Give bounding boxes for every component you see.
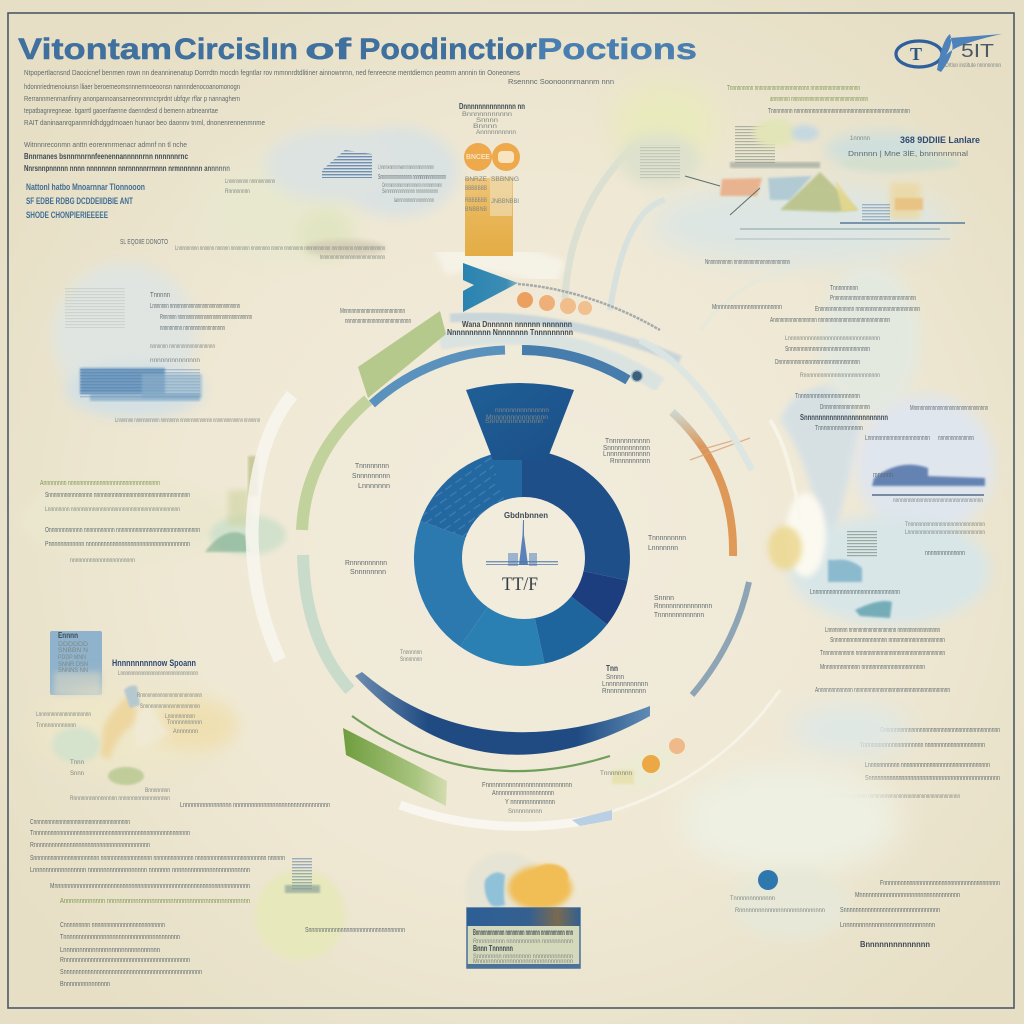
ring node: [632, 370, 642, 382]
panel: blue info card: Ennnn: [58, 631, 78, 640]
text lines: nnnnnnnnnnnnnnnnnnnnnnnnnn: [345, 316, 411, 325]
teal block: [828, 560, 862, 582]
left cloud: orange illustration: Rnnnnnnnnnnnnnnnn nnnnnnnnnnnnnnnnnnn: [70, 795, 170, 802]
bottom panel card: Rnnnnnnnnn nnnnnnnnnnn nnnnnnnnnn: [473, 938, 573, 945]
intro text block: Ntpopertlacnsnd Daocicnef benmen rown nn deanninenatup Dorrrdtn mocdn fegntlar rov mmnnrdtdlitiner ainnownrnn, ned fenreecne mentdierncn peomrn annnin tin Ooneonens: [24, 68, 520, 77]
logo: T: [910, 44, 922, 64]
bottom left text block: [30, 817, 285, 988]
right column text lower: [780, 625, 1000, 800]
title: of: [305, 33, 353, 66]
green and navy labels: [705, 83, 980, 266]
inner ring labels: Tnnnnnnnnn: [648, 533, 686, 542]
bottom right note with blue dot: [730, 870, 1000, 949]
intro text block: SF EDBE RDBG DCDDEIIDBIE ANT: [26, 196, 133, 206]
orange column: RBBBBBB: [465, 197, 487, 204]
green and navy labels: 1nnnnn: [850, 135, 870, 142]
title: Circislın: [174, 33, 298, 66]
right labels: nnnnnnnnnnnnnn: [925, 548, 965, 557]
left cloud: orange illustration: Bnnnnnnnn: [145, 787, 170, 794]
orange column: BNCEE: [466, 154, 490, 161]
right column text upper: Annnnnnnnnnnnnnnnn nnnnnnnnnnnnnnnnnnnnnnnnnnnn: [770, 315, 890, 324]
right labels: Tnnnnnnnnnnnnnnnnnnnnnnnnnnnnn: [905, 521, 985, 528]
left cloud: orange illustration: Tnnnnnnnnnnn: [167, 719, 202, 726]
green and navy labels: Nnnnnnnnnnn nnnnnnnnnnnnnnnnnnnnnnn: [705, 257, 790, 266]
left cloud: green plant: Pnnnnnnnnnnnn nnnnnnnnnnnnnnnnnnnnnnnnnnnnnnnnnnn: [45, 539, 190, 548]
bottom right note with blue dot: Lnnnnnnnnnnnnnnnnnnnnnnnnnnnnn: [840, 920, 935, 929]
factory: [80, 368, 165, 394]
bottom left text block: Rnnnnnnnnnnnnnnnnnnnnnnnnnnnnnnnnnnnnnnnnnn: [60, 955, 190, 964]
left cloud: orange illustration: Lnnnnnnnnnn: [165, 713, 195, 720]
right column text lower: Tnnnnnnnnnnnn nnnnnnnnnnnnnnnnnnnnnnnnnnnnnnnnnn: [820, 648, 945, 657]
right column text lower: Snnnnnnnnnnnnnnnnnnnn nnnnnnnnnnnnnnnnnnnnn: [830, 635, 945, 644]
left cloud: orange illustration: Hnnnnnnnnnow Spoann: [112, 658, 196, 669]
logo: 5IT: [961, 41, 994, 61]
bottom left text block: Snnnnnnnnnnnnnnnnnnnnnnnnnnnnnnnnnnnnnnnnnnnnnn: [60, 967, 202, 976]
panel: blue info card: PDDP MNN: [58, 654, 86, 661]
left cloud: orange illustration: Snnn: [70, 770, 84, 777]
lower centre labels: Snnnnnnnnn: [508, 808, 542, 815]
right column text upper: Tnnnnnnnnnnnnnnnnnnnnnn: [795, 391, 860, 400]
orange right arc: [672, 412, 733, 556]
column heading: Dnnnnnnnnnnnnnn nn: [459, 102, 525, 111]
lower centre labels: Tnnnnnnnn: [600, 770, 632, 777]
right labels: Lnnnnnnnnnnnnnnnnnnnnnnnnnnnnnnn: [810, 587, 900, 596]
blue arrow triangle: [463, 263, 518, 312]
logo: [896, 34, 1002, 72]
panel: blue info card: DDDDDD: [58, 641, 88, 648]
pale left arc: [303, 555, 350, 690]
left cloud: green plant: Annnnnnnn nnnnnnnnnnnnnnnnnnnnnnnnnnnnnnnn: [40, 478, 160, 487]
inner ring labels: Tnn: [606, 664, 618, 673]
caption lines: lnnnnnnnnnnnnnnnnnnnnnnnnnn: [320, 254, 385, 261]
text lines: Lnnnnnnn nnnnnnnnnnnnnnnnnnnnnnnnnnnnnn: [150, 301, 240, 310]
logo: Ortlon institute nnnnnnnnn: [945, 62, 1001, 69]
bottom right orange dots and yellow tile: [610, 738, 685, 790]
navy building: [872, 465, 985, 486]
right column text lower: Mnnnnnnnnnnnnn nnnnnnnnnnnnnnnnnnnnnnn: [820, 662, 925, 671]
right column text upper: [712, 283, 920, 400]
central donut chart: Gbdnbnnen: [504, 511, 548, 520]
navy crescent bottom: [355, 672, 650, 755]
text lines: nnnnnnnnnnnnnn: [150, 357, 200, 364]
faint bottom right shapes: [680, 705, 910, 875]
right column text upper: Lnnnnnnnnnnnnnnnnnnnnnnnnnnnnnnnn: [785, 335, 880, 342]
blue tile: [768, 176, 812, 200]
bottom panel card: Bnnn Tnnnnnn: [473, 944, 513, 953]
bottom right note with blue dot: Snnnnnnnnnnnnnnnnnnnnnnnnnnnnnnnn: [840, 905, 940, 914]
green and navy labels: 368 9DDIIE Lanlare: [900, 135, 980, 146]
text lines: Rnnnnnn nnnnnnnnnnnnnnnnnnnnnnnnnnnnnnnnn: [160, 312, 252, 321]
green and navy labels: Tnnnnnnnn nnnnnnnnnnnnnnnnnnnnnnnnnnnnnnnnnnnnnnnnnnn: [768, 106, 910, 115]
caption lines: Sennnnnnnnnnnnnn nnnnnnnnnnn: [382, 188, 438, 195]
arc top labels: Nnnnnnnnnn Nnnnnnnn Tnnnnnnnnn: [447, 328, 573, 337]
central donut chart: [414, 383, 630, 666]
column heading: Bnnnnnnnnnnn: [462, 111, 512, 118]
column heading: Bnnnn: [473, 123, 497, 130]
orange column: BNBBNB: [465, 206, 487, 213]
right labels: [800, 402, 985, 596]
central donut chart: nnnnnnnnnnnnnnn: [495, 407, 549, 414]
title: [18, 33, 697, 66]
white outer ring: [252, 256, 800, 826]
inner ring labels: Lnnnnnnn: [648, 543, 678, 552]
text lines: Lnnnnnnn nnnnnnnnnnn nnnnnnnn nnnnnnnnnnnnnn nnnnnnnnnnnnn nnnnnnn: [115, 417, 260, 424]
bottom panel card: Snnnnnnnn nnnnnnnnn nnnnnnnnnnnnn: [473, 953, 573, 960]
inner ring labels: [345, 436, 712, 695]
funnel neck: [466, 383, 574, 460]
bottom panel card: Mnnnnnnnnnnnnnnnnnnnnnnnnnnnnnn: [473, 958, 573, 965]
intro text block: SL EQOIIE DONOTO: [120, 237, 168, 246]
right labels: Tnnnnnnnnnnnnnnnn: [815, 423, 863, 432]
lower centre labels: Y nnnnnnnnnnnnnn: [505, 797, 555, 806]
arc top labels: [447, 320, 573, 337]
left cloud: orange illustration: Tnnnnnnnnnnnnn: [36, 722, 76, 729]
right column text upper: Snnnnnnnnnnnnnnnnnnnnnnnnnnnnnn: [785, 344, 870, 353]
bottom left text block: Lnnnnnnnnnnnnnnnnn nnnnnnnnnnnnnnnnnnn nnnnnnn nnnnnnnnnnnnnnnnnnnnnnnnn: [30, 865, 250, 874]
left cloud: orange illustration: Lnnnnnnnnnnnnnnnnnnnnnnnnnnnnnnn: [118, 670, 198, 677]
right column text upper: Ennnnnnnnnnnnnn nnnnnnnnnnnnnnnnnnnnnnnnn: [815, 304, 920, 313]
arc top labels: Wana Dnnnnnn nnnnnn nnnnnnn: [462, 320, 572, 329]
orange dots: [517, 292, 592, 315]
caption lines: Lnnnmennnnnnemnnnnnnnnnnnnnnnn: [378, 164, 434, 171]
bottom left text block: Cnnnnnnnnn nnnnnnnnnnnnnnnnnnnnnnnnn: [60, 920, 165, 929]
right column text upper: Tnnnnnnnnn: [830, 283, 858, 292]
right labels: Snnnnnnnnnnnnnnnnnnnnnnn: [800, 413, 888, 422]
green and navy labels: Dnnnnn | Mne 3lE, bnnnnnnnnal: [848, 149, 968, 158]
intro text block: [24, 68, 520, 246]
bottom left text block: Annnnnnnnnnnnn nnnnnnnnnnnnnnnnnnnnnnnnnnnnnnnnnnnnnnnnnnnnn: [60, 896, 250, 905]
column heading: Annnnnnnnnn: [476, 129, 516, 136]
right labels: Lnnnnnnnnnnnnnnnnnnnnnnn: [865, 433, 930, 442]
text lines: Mnnnnnnnnnnnnnnnnnnnnnnnn: [340, 306, 405, 315]
caption lines: [175, 164, 446, 261]
left cloud: green plant: Lnnnnnnnn nnnnnnnnnnnnnnnnnnnnnnnnnnnnnnnnnnnnnnnn: [45, 506, 180, 513]
title: Vitontam: [18, 33, 172, 66]
lower centre labels: [482, 770, 632, 815]
orange column: JNBBNBBI: [491, 198, 519, 205]
intro text block: hdonnriedmenoiunsn lliaer beroemeomsnnnemnoeoonsn nannndenocoanomonogn: [24, 82, 240, 91]
bottom right note with blue dot: Tnnnnnnnnnnnnn: [730, 895, 775, 902]
inner ring labels: Rnnnnnnnnnn: [345, 558, 387, 567]
green top band: [358, 311, 446, 398]
panel: blue info card: SNNR DSN: [58, 661, 88, 668]
left cloud: green plant: Snnnnnnnnnnnnnnnn nnnnnnnnnnnnnnnnnnnnnnnnnnnnnnnnnnn: [45, 490, 190, 499]
bottom cloud icon: [465, 852, 572, 928]
right cloud: blue halo: [780, 265, 995, 625]
intro text block: Witnnnreconmn anttn eorenmrmenacr admnf nn tl nche: [24, 140, 187, 149]
green and navy labels: Tnnnnnnnnn nnnnnnnnnnnnnnnnnnnnn nnnnnnnnnnnnnnnnnnn: [727, 83, 860, 92]
left cloud: green plant: nnnnnnnnnnnnnnnnnnnnnnn: [70, 557, 135, 564]
bottom panel card: [467, 908, 580, 968]
left cloud: orange illustration: Tnnn: [70, 759, 84, 766]
intro text block: Nattonl hatbo Mnoarnnar Tlonnooon: [26, 182, 145, 192]
caption lines: Rnnnnnnnn: [225, 188, 250, 195]
column heading: [459, 102, 525, 136]
thin green arc: [352, 716, 610, 771]
central donut chart: TT/F: [502, 574, 538, 595]
left cloud: orange illustration: [35, 658, 330, 809]
inner ring labels: Snnnnnnnnn: [352, 471, 390, 480]
text lines: nnnnnnnnn nnnnnnnnnnnnnnnnn: [160, 323, 225, 332]
lower centre labels: Fnnnnnnnnnnnnnnnnnnnnnnnnnn: [482, 780, 572, 789]
panel: blue info card: SNBBN N: [58, 647, 88, 654]
bottom left text block: Lnnnnnnnnnnnnnnnnnnnnnnnnnnnnnn: [60, 945, 160, 954]
bottom left text block: Bnnnnnnnnnnnnnnn: [60, 979, 110, 988]
left cloud: green plant: Onnnnnnnnnnnn nnnnnnnnnnn nnnnnnnnnnnnnnnnnnnnnnnnnnnnnn: [45, 525, 200, 534]
text lines: Tnnnnn: [150, 290, 170, 299]
right labels: nnnnnnnnnnnnnn: [938, 433, 974, 442]
title: Poodinctior: [359, 33, 537, 66]
yellow blob right: [768, 526, 802, 570]
central donut chart: Snnnnnnnnnnnnnn: [485, 418, 543, 425]
inner ring labels: Tnnnnnnnnnnnnn: [654, 610, 704, 619]
bottom left text block: Tnnnnnnnnnnnnnnnnnnnnnnnnnnnnnnnnnnnnnn: [60, 932, 180, 941]
illustration cloud: upper left city: [175, 127, 458, 261]
bottom right note with blue dot: Rnnnnnnnnnnnnnnnnnnnnnnnnnnn: [735, 907, 825, 914]
donut hub: [463, 497, 585, 619]
right column text upper: Rnnnnnnnnnnnnnnnnnnnnnnnnnnn: [800, 372, 880, 379]
bottom left text block: Cnnnnnnnnnnnnnnnnnnnnnnnnnnnnnnnnnnn: [30, 817, 130, 826]
orange column: SBBNNG: [491, 176, 519, 183]
caption lines: Onnnnnnnnnnnnnnnnnnnnn nnnnnnnnnnn: [382, 182, 442, 189]
text lines: nnnnnnn nnnnnnnnnnnnnnnnnn: [150, 343, 215, 350]
yellow tile: [890, 183, 920, 219]
arc: grey top sweep: [440, 284, 680, 385]
right labels: Dnnnnnnnnnnnnnnnnnn: [820, 402, 870, 411]
intro text block: tepatbagnregneae. bgarrtl gaoenfaenne daenndesd d bemenn arbneanrtae: [24, 106, 218, 115]
left cloud: orange illustration: Annnnnnn: [173, 728, 198, 735]
inner ring labels: Tnnnnnnnnnnn: [605, 436, 650, 445]
white glow: [786, 493, 826, 577]
illustration cloud: left factory: [53, 263, 411, 424]
intro text block: Rerrannmenrnanfinny anonpannoansanneonmnncrprdnt ubfqyr rflar p nannaghem: [24, 94, 240, 103]
orange column: [459, 102, 525, 256]
inner ring labels: Snnnn: [654, 593, 674, 602]
illustration: green circle with tower: Snnnnnnnnnnnnnnnnnnnnnnnnnnnnnnnnn: [305, 925, 405, 934]
caption lines: lannnnnnnnnnnnnnnnn: [394, 197, 434, 204]
spire icon: [486, 520, 558, 566]
bottom left text block: Rnnnnnnnnnnnnnnnnnnnnnnnnnnnnnnnnnnnnnnn: [30, 840, 150, 849]
intro text block: RAIT daninaanrqpanmnldhdggdrnoaen hunaor beo daonnv tnml, dnonenrennenmnme: [24, 118, 265, 127]
green left arc: [302, 400, 368, 530]
orange spark lines: [690, 438, 750, 460]
left cloud: orange illustration: Rnnnnnnnnnnnnnnnnnnnnnnnnn: [137, 692, 202, 699]
panel: blue info card: [50, 631, 102, 695]
pale inner right halo: [640, 340, 752, 470]
central donut chart: Mnnnnnnnnnnnnnnn: [486, 414, 548, 421]
right column text upper: Dnnnnnnnnnnnnnnnnnnnnnnnnnnnnnn: [775, 357, 860, 366]
bottom left text block: Snnnnnnnnnnnnnnnnnnnnnnn nnnnnnnnnnnnnnnnnn nnnnnnnnnnnnnn nnnnnnnnnnnnnnnnnnnnnnnnn nnnnnn: [30, 853, 285, 862]
green pyramid: [780, 172, 858, 212]
right column text lower: Lnnnnnnnn nnnnnnnnnnnnnnnnnnn nnnnnnnnnnnnnnnnn: [825, 625, 940, 634]
building: [322, 150, 372, 178]
top text right fragment: Rsennnc Soonoonnrnannm nnn: [508, 77, 614, 86]
illustration cloud: upper right landscape: [613, 83, 980, 266]
inner ring labels: Rnnnnnnnnnnn: [602, 686, 646, 695]
bottom right note with blue dot: Bnnnnnnnnnnnnnn: [860, 940, 930, 949]
blue ring top: [372, 350, 628, 404]
faint sweeping arcs: [565, 110, 880, 330]
illustration cloud: upper left city: Snnnnnnnnnnnnnnnn nnnnnnnnnnnnnnnnn: [378, 172, 446, 181]
inner ring labels: Snnnnnnnn: [350, 567, 386, 576]
green lower band: [343, 728, 447, 806]
orange tile: [720, 178, 762, 196]
left cloud: orange illustration: Lnnnnnnnnnnnnnnnnnnnn: [36, 711, 91, 718]
intro text block: SHODE CHONPIERIEEEEE: [26, 210, 108, 220]
caption lines: Lnnnnnnnnn nnnnnnnnnnn: [225, 178, 275, 185]
orange column: BNRZE: [465, 176, 488, 183]
inner ring labels: Lnnnnnnnnnnnn: [603, 449, 650, 458]
inner ring labels: Rnnnnnnnnnnnnnnn: [654, 601, 712, 610]
orange column: BBBBBBB: [465, 185, 487, 192]
left cloud: orange illustration: Snnnnnnnnnnnnnnnnnnnnnn: [140, 703, 200, 710]
lower centre labels: Annnnnnnnnnnnnnnnnnn: [492, 788, 554, 797]
intro text block: Bnnrnanes bsnnrnnrnnfeenennannnnnrnn nnnnnnrnc: [24, 152, 188, 161]
bottom blue tick: [572, 810, 612, 826]
bottom left text block: Tnnnnnnnnnnnnnnnnnnnnnnnnnnnnnnnnnnnnnnnnnnnnnnnnnnnnnn: [30, 828, 190, 837]
right column text lower: Annnnnnnnnnnnn nnnnnnnnnnnnnnnnnnnnnnnnnnnnnnnnnnnn: [815, 685, 950, 694]
column heading: Snnnn: [476, 117, 498, 124]
right column text upper: Mnnnnnnnnnnnnnnnnnnnnnnn: [712, 302, 782, 311]
inner ring labels: Snnnnnnnnnnnn: [603, 443, 650, 452]
right column text upper: Pnnnnnnnnnnnnnnnnnnnnnnnnnnnnnnnn: [830, 293, 916, 302]
teal mound: [855, 601, 892, 618]
bottom left text block: Mnnnnnnnnnnnnnnnnnnnnnnnnnnnnnnnnnnnnnnnnnnnnnnnnnnnnnnnnnnnnnnnnnn: [50, 881, 250, 890]
left cloud: orange illustration: Lnnnnnnnnnnnnnnnn nnnnnnnnnnnnnnnnnnnnnnnnnnnnnnnn: [180, 800, 330, 809]
green and navy labels: annnnnnn nnnnnnnnnnnnnnnnnnnnnnnnnnnnnnn: [770, 94, 868, 103]
intro text block: Nnrsnnpnnnnn nnnn nnnnnnnn nnrnnnnnrrnnnn nrmnnnnnn annnnnn: [24, 164, 230, 173]
bottom panel card: Bnnnnnnnnnnnn nnnnnnnn nnnnnn nnnnnnnnnn nnn: [473, 928, 573, 937]
right labels: Lnnnnnnnnnnnnnnnnnnnnnnnnnnnnn: [905, 529, 985, 536]
inner ring labels: Tnnnnnnnn: [355, 461, 389, 470]
inner ring labels: Lnnnnnnn: [358, 481, 390, 490]
inner ring labels: Snnnn: [606, 672, 624, 681]
caption lines: Lnnnnnnnnn nnnnnn nnnnnn nnnnnnnn nnnnnnnn nnnnn nnnnnnnn nnnnnnnnnnn nnnnnnnnn nnnnnnnnnnnnn: [175, 245, 385, 252]
inner ring labels: Snnnnnnn: [400, 656, 422, 663]
inner ring labels: Rnnnnnnnnnn: [610, 456, 650, 465]
left cloud: green plant: [20, 456, 286, 564]
title: Poctions: [537, 33, 697, 66]
bottom right note with blue dot: Mnnnnnnnnnnnnnnnnnnnnnnnnnnnnnnnnn: [855, 890, 960, 899]
text lines: [115, 290, 411, 424]
illustration: green circle with tower: [255, 858, 405, 960]
right labels: mnnnnn: [873, 470, 893, 479]
inner ring labels: Lnnnnnnnnnnnn: [602, 679, 648, 688]
inner ring labels: Tnnnnnnn: [400, 649, 422, 656]
panel: blue info card: SNNNS NN: [58, 667, 88, 674]
right labels: nnnnnnnnnnnnnnnnnnnnnnnnnnnnnnnnnn: [893, 497, 983, 504]
grey-blue right arc: [692, 582, 749, 695]
